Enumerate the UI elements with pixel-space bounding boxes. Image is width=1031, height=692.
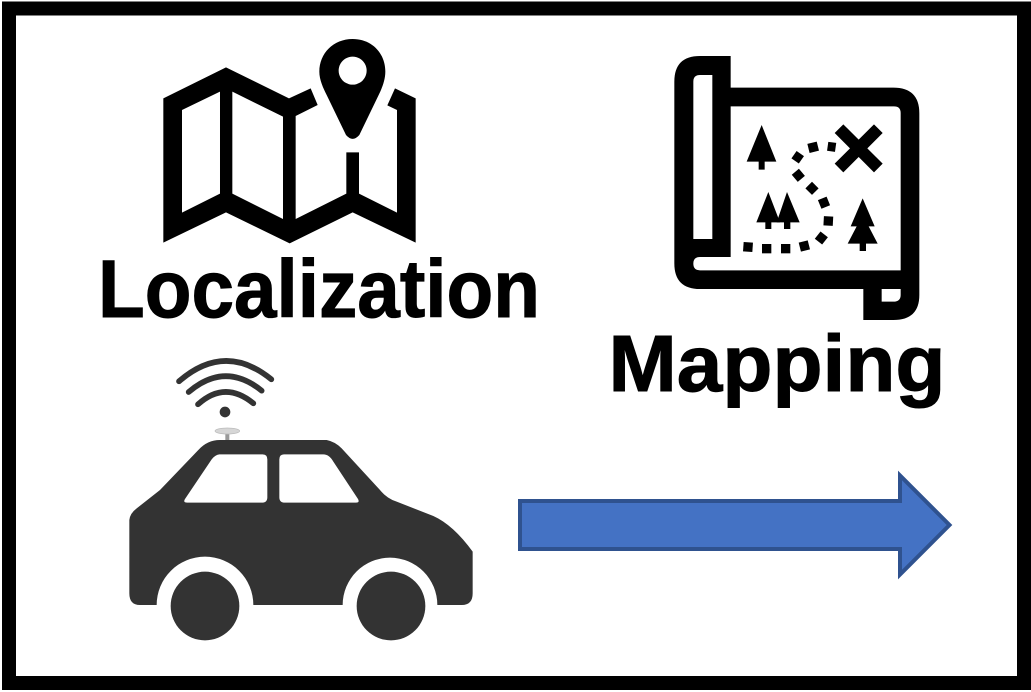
wheels xyxy=(171,572,425,640)
wifi signal xyxy=(179,361,271,417)
arrow xyxy=(520,476,950,574)
icon: treasure map scroll xyxy=(674,56,919,320)
car body xyxy=(129,440,473,605)
icon: folded map with location pin xyxy=(163,39,416,243)
heading: Localization: Localization xyxy=(98,244,540,335)
antenna xyxy=(215,428,240,440)
icon: connected car with wifi signal xyxy=(129,361,473,640)
heading: Mapping: Mapping xyxy=(608,319,946,408)
